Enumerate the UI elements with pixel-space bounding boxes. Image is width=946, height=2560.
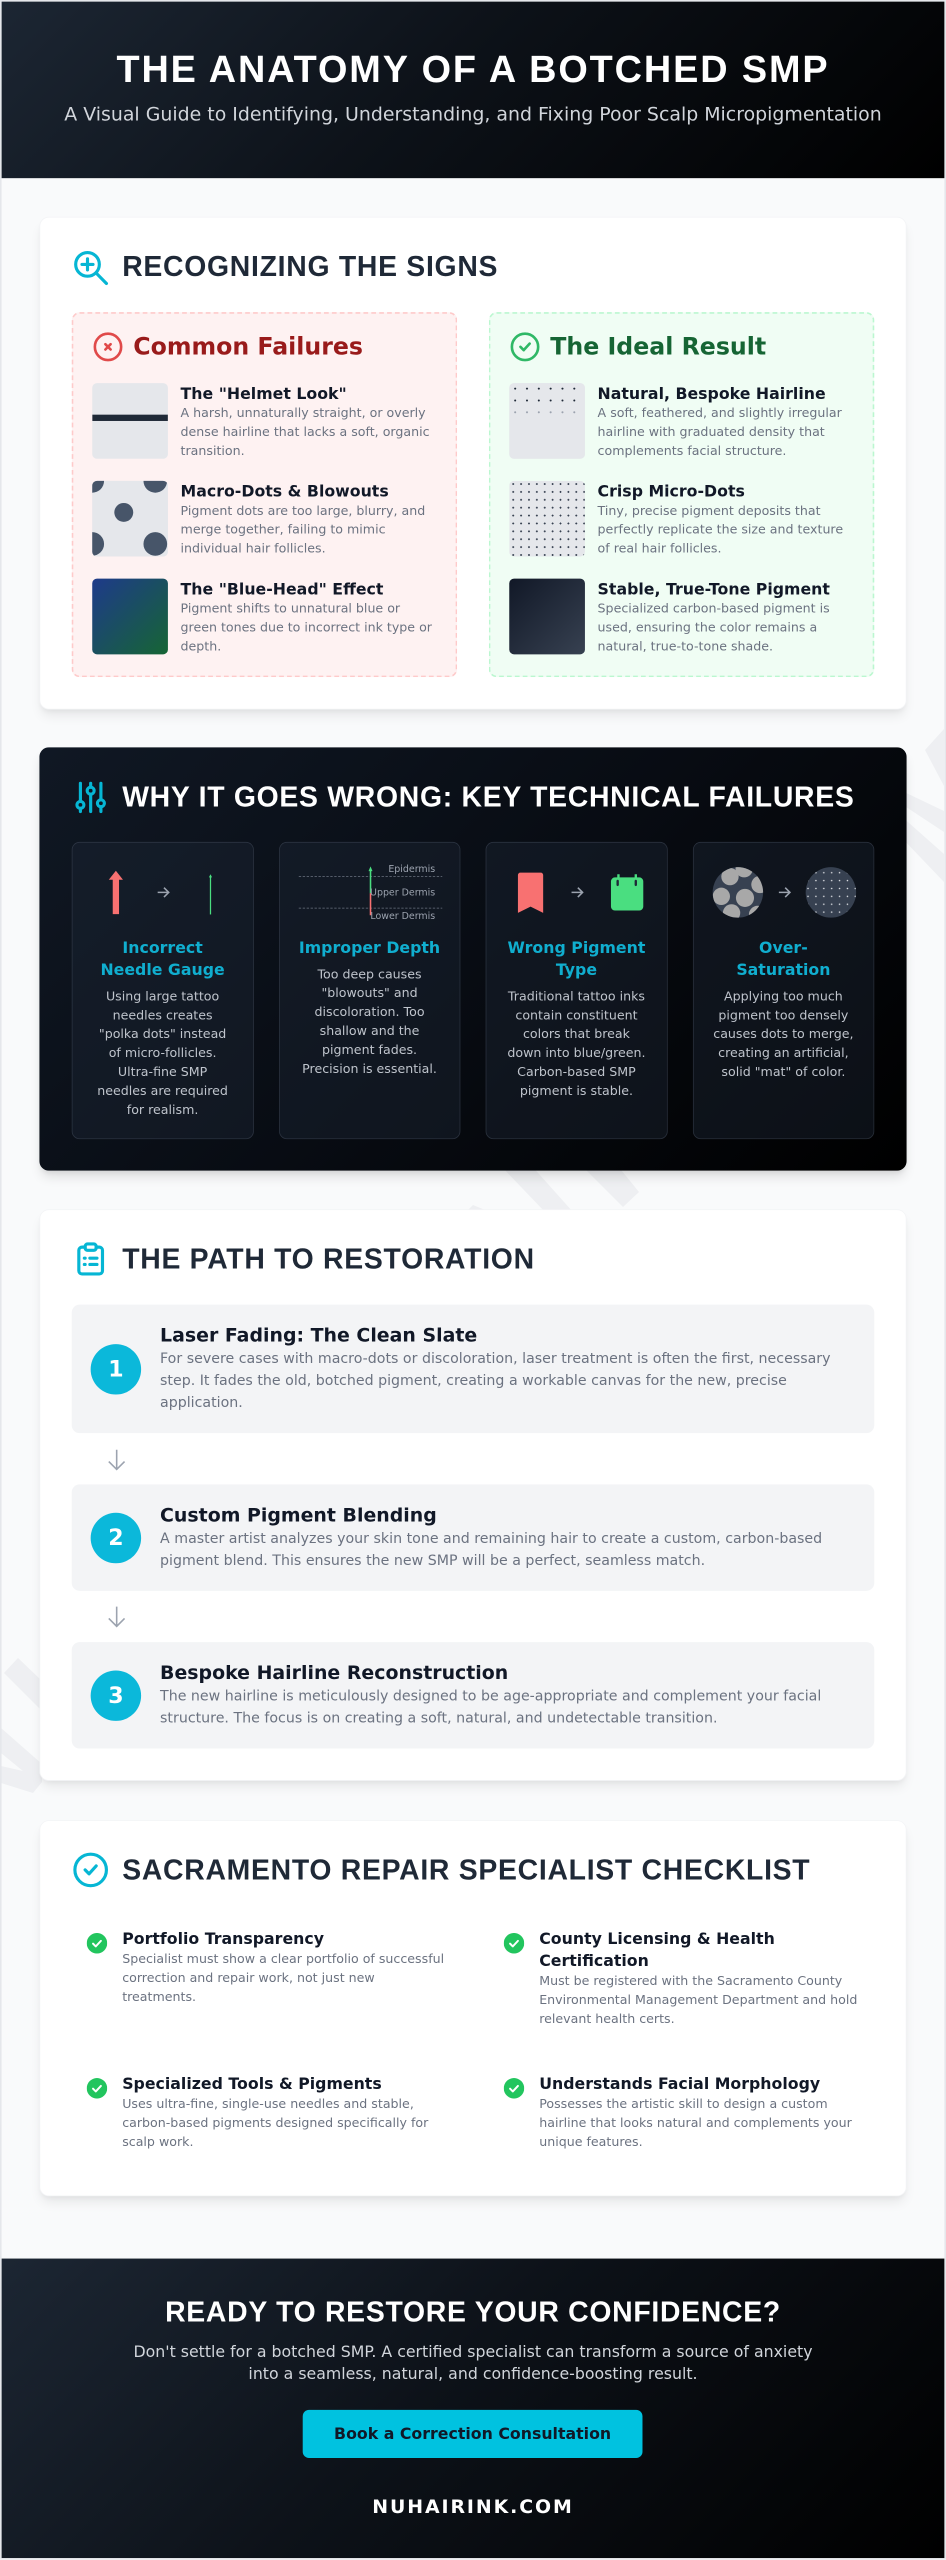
heading: why it goes wrong: WHY IT GOES WRONG: KEY TECHNICAL FAILURES [122, 780, 855, 813]
button: book consultation [303, 2410, 642, 2458]
result: micro dots [510, 481, 843, 556]
text: step 3: The new hairline is meticulously designed to be age-appropriate and complement your facial [160, 1688, 821, 1705]
text: blue head: The "Blue-Head" Effect [181, 579, 383, 598]
text: natural hairline [598, 384, 842, 458]
item: county licensing: relevant health certs. [539, 2011, 675, 2026]
check icon: licensing [504, 1933, 524, 1953]
text: step 3 [160, 1662, 821, 1727]
text: macro dots: individual hair follicles. [181, 541, 326, 556]
text: needle gauge: for realism. [127, 1102, 198, 1117]
step number 1: 1 [108, 1356, 124, 1382]
header banner [2, 2, 944, 178]
panel: ideal result [489, 312, 874, 677]
text: wrong pigment [507, 989, 646, 1098]
item: portfolio transparency: Portfolio Transparency [122, 1929, 324, 1948]
item: facial morphology: Understands Facial Morphology [539, 2074, 820, 2093]
text: stable pigment [598, 579, 830, 654]
text: step 1: For severe cases with macro-dots or discoloration, laser treatment is often the first, necessary [160, 1351, 831, 1367]
text: step 2 [160, 1504, 822, 1569]
icon: sliders [75, 782, 106, 814]
title: over-saturation: Saturation [736, 960, 830, 979]
text: macro dots: Macro-Dots & Blowouts [181, 482, 389, 501]
text: stable pigment: Specialized carbon-based pigment is [598, 601, 830, 616]
text: stable pigment: Stable, True-Tone Pigment [598, 579, 830, 598]
result: natural hairline [509, 383, 842, 459]
diagram: skin layers: Lower Dermis [370, 911, 435, 922]
text: micro dots: Crisp Micro-Dots [598, 482, 745, 501]
text: needle gauge [97, 989, 228, 1117]
text: wrong pigment: Carbon-based SMP [517, 1064, 636, 1079]
text: wrong pigment: Traditional tattoo inks [508, 989, 645, 1004]
text: step 2: pigment blend. This ensures the new SMP will be a perfect, seamless match. [160, 1552, 705, 1569]
item: facial morphology: unique features. [539, 2134, 643, 2149]
check icon: tools [87, 2078, 107, 2099]
title: needle gauge: Needle Gauge [100, 960, 225, 979]
text: stable pigment: natural, true-to-tone shade. [598, 639, 773, 654]
text: helmet look [180, 384, 430, 458]
text: micro dots: Tiny, precise pigment deposits that [598, 503, 821, 518]
text: natural hairline: complements facial structure. [598, 443, 786, 458]
icon: x circle [94, 332, 122, 362]
button: book consultation: Book a Correction Consultation [334, 2424, 611, 2443]
title: needle gauge: Incorrect [122, 938, 203, 957]
text: improper depth: Precision is essential. [302, 1061, 437, 1076]
heading: path to restoration: THE PATH TO RESTORATION [122, 1242, 535, 1275]
thumbnail: charcoal gradient [509, 579, 585, 654]
text: step 1: Laser Fading: The Clean Slate [160, 1324, 477, 1346]
failure: blue head [92, 578, 432, 654]
diagram: skin layers [298, 864, 442, 922]
thumbnail: fine dot grid [509, 481, 585, 557]
panel: common failures [72, 312, 457, 677]
failure: macro dots [92, 480, 425, 556]
diagram: bad ink vs carbon pigment [518, 872, 644, 913]
item: portfolio transparency [122, 1927, 444, 2006]
title: wrong pigment [508, 938, 646, 979]
item: portfolio transparency: correction and repair work, not just new [122, 1970, 375, 1985]
step number 1 [91, 1344, 141, 1394]
icon: magnifier [74, 251, 108, 286]
step 2 [72, 1484, 874, 1591]
item: county licensing [539, 1927, 857, 2029]
diagram: skin layers: Upper Dermis [370, 888, 435, 899]
footer heading: READY TO RESTORE YOUR CONFIDENCE? [165, 2296, 781, 2328]
panel: why it goes wrong [39, 747, 907, 1171]
text: macro dots: merge together, failing to mimic [181, 522, 386, 537]
item: portfolio transparency: treatments. [122, 1989, 196, 2004]
text: over-saturation: creating an artificial, [718, 1046, 849, 1061]
text: step 1: step. It fades the old, botched pigment, creating a workable canvas for the new, precise [160, 1373, 787, 1389]
footer call to action [2, 2259, 944, 2558]
text: needle gauge: Using large tattoo [106, 989, 219, 1004]
item: specialized tools [122, 2073, 428, 2151]
item: specialized tools: scalp work. [122, 2134, 193, 2149]
check icon: morphology [504, 2078, 524, 2099]
text: wrong pigment: pigment is stable. [520, 1083, 633, 1098]
footer text [2, 2341, 944, 2385]
icon: check circle [510, 332, 540, 362]
icon: clipboard [77, 1242, 104, 1276]
text: natural hairline: A soft, feathered, and slightly irregular [598, 406, 842, 421]
text: blue head: depth. [181, 639, 221, 654]
card: needle gauge [72, 842, 253, 1139]
text: over-saturation [713, 989, 854, 1079]
text: wrong pigment: down into blue/green. [507, 1046, 646, 1061]
text: needle gauge: "polka dots" instead [99, 1027, 226, 1042]
text: improper depth: pigment fades. [322, 1042, 417, 1057]
diagram: large needle vs fine needle [108, 870, 212, 914]
title: needle gauge [100, 938, 225, 979]
item: facial morphology: Possesses the artistic skill to design a custom [539, 2096, 828, 2111]
failure: helmet look [92, 383, 430, 459]
item: specialized tools: Specialized Tools & Pigments [122, 2074, 382, 2093]
thumbnail: straight hairline bar [92, 383, 168, 459]
title: wrong pigment: Wrong Pigment [508, 938, 645, 957]
step number 2 [91, 1512, 141, 1563]
text: improper depth [302, 967, 437, 1076]
website: NUHAIRINK.COM [372, 2496, 574, 2518]
text: step 2: Custom Pigment Blending [160, 1504, 437, 1526]
text: macro dots [181, 482, 425, 556]
diagram: merged dots vs fine dots [712, 867, 856, 918]
item: facial morphology [539, 2073, 852, 2151]
text: improper depth: "blowouts" and [321, 986, 418, 1001]
text: needle gauge: of micro-follicles. [109, 1046, 216, 1061]
text: step 3: structure. The focus is on creating a soft, natural, and undetectable transition. [160, 1710, 717, 1727]
panel: repair specialist checklist [39, 1820, 907, 2196]
text: blue head [180, 579, 432, 654]
title: over-saturation [736, 938, 830, 979]
item: portfolio transparency: Specialist must show a clear portfolio of successful [122, 1951, 444, 1966]
text: step 2: A master artist analyzes your skin tone and remaining hair to create a custom, carbon-based [160, 1530, 822, 1547]
icon: badge check [73, 1852, 108, 1888]
footer text: Don't settle for a botched SMP. A certified specialist can transform a source of anxiety [133, 2342, 813, 2361]
main title: THE ANATOMY OF A BOTCHED SMP [116, 49, 830, 91]
item: county licensing: Environmental Management Department and hold [539, 1992, 857, 2007]
text: step 1 [160, 1324, 831, 1411]
step 3 [72, 1642, 874, 1749]
step 1 [72, 1305, 874, 1433]
text: over-saturation: pigment too densely [718, 1008, 848, 1023]
text: blue head: Pigment shifts to unnatural blue or [181, 601, 400, 616]
check icon: portfolio [86, 1933, 108, 1954]
text: improper depth: discoloration. Too [315, 1004, 425, 1019]
subtitle: A Visual Guide to Identifying, Understanding, and Fixing Poor Scalp Micropigmentation [64, 103, 882, 125]
text: helmet look: transition. [181, 443, 245, 458]
item: specialized tools: Uses ultra-fine, single-use needles and stable, [122, 2096, 414, 2111]
text: helmet look: dense hairline that lacks a soft, organic [181, 424, 430, 439]
footer text: into a seamless, natural, and confidence-boosting result. [248, 2364, 698, 2383]
text: over-saturation: Applying too much [724, 989, 843, 1004]
text: step 1: application. [160, 1395, 243, 1411]
panel: path to restoration [39, 1209, 907, 1781]
item: specialized tools: carbon-based pigments designed specifically for [122, 2115, 428, 2130]
thumbnail: large dots [92, 481, 168, 557]
panel: recognizing the signs [39, 217, 907, 709]
title: improper depth: Improper Depth [299, 938, 440, 957]
text: needle gauge: Ultra-fine SMP [118, 1064, 207, 1079]
text: step 3: Bespoke Hairline Reconstruction [160, 1662, 508, 1684]
text: blue head: green tones due to incorrect ink type or [181, 620, 432, 635]
thumbnail: blue-green gradient [92, 579, 168, 654]
text: helmet look: A harsh, unnaturally straight, or overly [181, 406, 426, 421]
item: county licensing: Must be registered with the Sacramento County [539, 1973, 842, 1988]
heading: recognizing the signs: RECOGNIZING THE SIGNS [122, 250, 498, 282]
item: facial morphology: hairline that looks natural and complements your [539, 2115, 852, 2130]
text: micro dots [597, 482, 843, 556]
result: stable pigment [509, 578, 830, 654]
text: natural hairline: Natural, Bespoke Hairline [598, 384, 826, 403]
text: improper depth: shallow and the [320, 1023, 419, 1038]
text: helmet look: The "Helmet Look" [181, 384, 347, 403]
step number 3: 3 [108, 1682, 124, 1708]
card: over-saturation [693, 842, 874, 1139]
card: improper depth [279, 842, 460, 1139]
heading: common failures: Common Failures [133, 333, 363, 361]
text: wrong pigment: contain constituent [515, 1008, 638, 1023]
card: wrong pigment [486, 842, 667, 1139]
text: macro dots: Pigment dots are too large, blurry, and [181, 503, 425, 518]
text: needle gauge: needles are required [97, 1083, 228, 1098]
diagram: skin layers: Epidermis [388, 864, 435, 875]
text: over-saturation: causes dots to merge, [713, 1027, 854, 1042]
title: over-saturation: Over- [759, 938, 808, 957]
text: natural hairline: hairline with graduated density that [598, 424, 825, 439]
text: wrong pigment: colors that break [523, 1027, 630, 1042]
text: micro dots: perfectly replicate the size and texture [598, 522, 843, 537]
heading: checklist: SACRAMENTO REPAIR SPECIALIST CHECKLIST [122, 1853, 810, 1886]
arrow: step 1 to 2 [108, 1450, 125, 1470]
arrow: step 2 to 3 [108, 1606, 125, 1628]
text: over-saturation: solid "mat" of color. [721, 1064, 845, 1079]
step number 2: 2 [108, 1524, 124, 1550]
text: improper depth: Too deep causes [317, 967, 422, 982]
text: stable pigment: used, ensuring the color remains a [598, 620, 817, 635]
step number 3 [91, 1670, 141, 1721]
heading: ideal result: The Ideal Result [550, 333, 766, 361]
thumbnail: graduated dots [509, 383, 585, 459]
text: micro dots: of real hair follicles. [598, 541, 722, 556]
title: wrong pigment: Type [556, 960, 597, 979]
item: county licensing: County Licensing & Health [539, 1929, 775, 1948]
item: county licensing: Certification [539, 1951, 649, 1970]
text: needle gauge: needles creates [113, 1008, 213, 1023]
